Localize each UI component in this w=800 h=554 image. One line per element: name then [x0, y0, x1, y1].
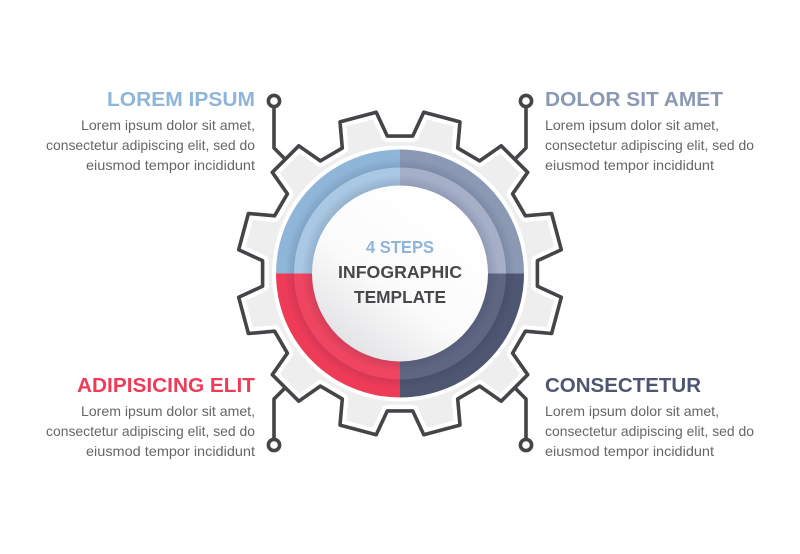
- segmented ring: [276, 150, 524, 398]
- text block: lorem ipsum: consectetur adipiscing elit, sed do: [46, 137, 255, 153]
- text block: lorem ipsum: Lorem ipsum dolor sit amet,: [81, 117, 255, 133]
- text block: consectetur: Lorem ipsum dolor sit amet,: [545, 403, 719, 419]
- text block: adipisicing elit: Lorem ipsum dolor sit amet,: [81, 403, 255, 419]
- text block: dolor sit amet: DOLOR SIT AMET: [545, 89, 723, 111]
- center text: 4 STEPS: [366, 237, 434, 257]
- text block: consectetur: consectetur adipiscing elit, sed do: [545, 423, 754, 439]
- text block: lorem ipsum: LOREM IPSUM: [107, 89, 255, 111]
- text block: consectetur: eiusmod tempor incididunt: [545, 443, 714, 459]
- connector top right: [515, 95, 532, 159]
- connector top left: [268, 95, 285, 159]
- text block: dolor sit amet: Lorem ipsum dolor sit amet,: [545, 117, 719, 133]
- connector bottom right: [515, 388, 532, 451]
- text block: adipisicing elit: [46, 375, 255, 459]
- text block: dolor sit amet: consectetur adipiscing elit, sed do: [545, 137, 754, 153]
- text block: dolor sit amet: eiusmod tempor incididunt: [545, 157, 714, 173]
- center text: [338, 237, 462, 307]
- text block: lorem ipsum: [46, 89, 255, 173]
- text block: dolor sit amet: [545, 89, 754, 173]
- text block: adipisicing elit: consectetur adipiscing elit, sed do: [46, 423, 255, 439]
- text block: consectetur: [545, 375, 754, 459]
- center text: TEMPLATE: [354, 287, 446, 307]
- text block: consectetur: CONSECTETUR: [545, 375, 702, 397]
- connector bottom left: [268, 388, 285, 451]
- center disc: [312, 186, 488, 362]
- text block: adipisicing elit: eiusmod tempor incididunt: [86, 443, 255, 459]
- gear: [239, 112, 561, 435]
- text block: adipisicing elit: ADIPISICING ELIT: [77, 375, 255, 397]
- text block: lorem ipsum: eiusmod tempor incididunt: [86, 157, 255, 173]
- center text: INFOGRAPHIC: [338, 262, 462, 282]
